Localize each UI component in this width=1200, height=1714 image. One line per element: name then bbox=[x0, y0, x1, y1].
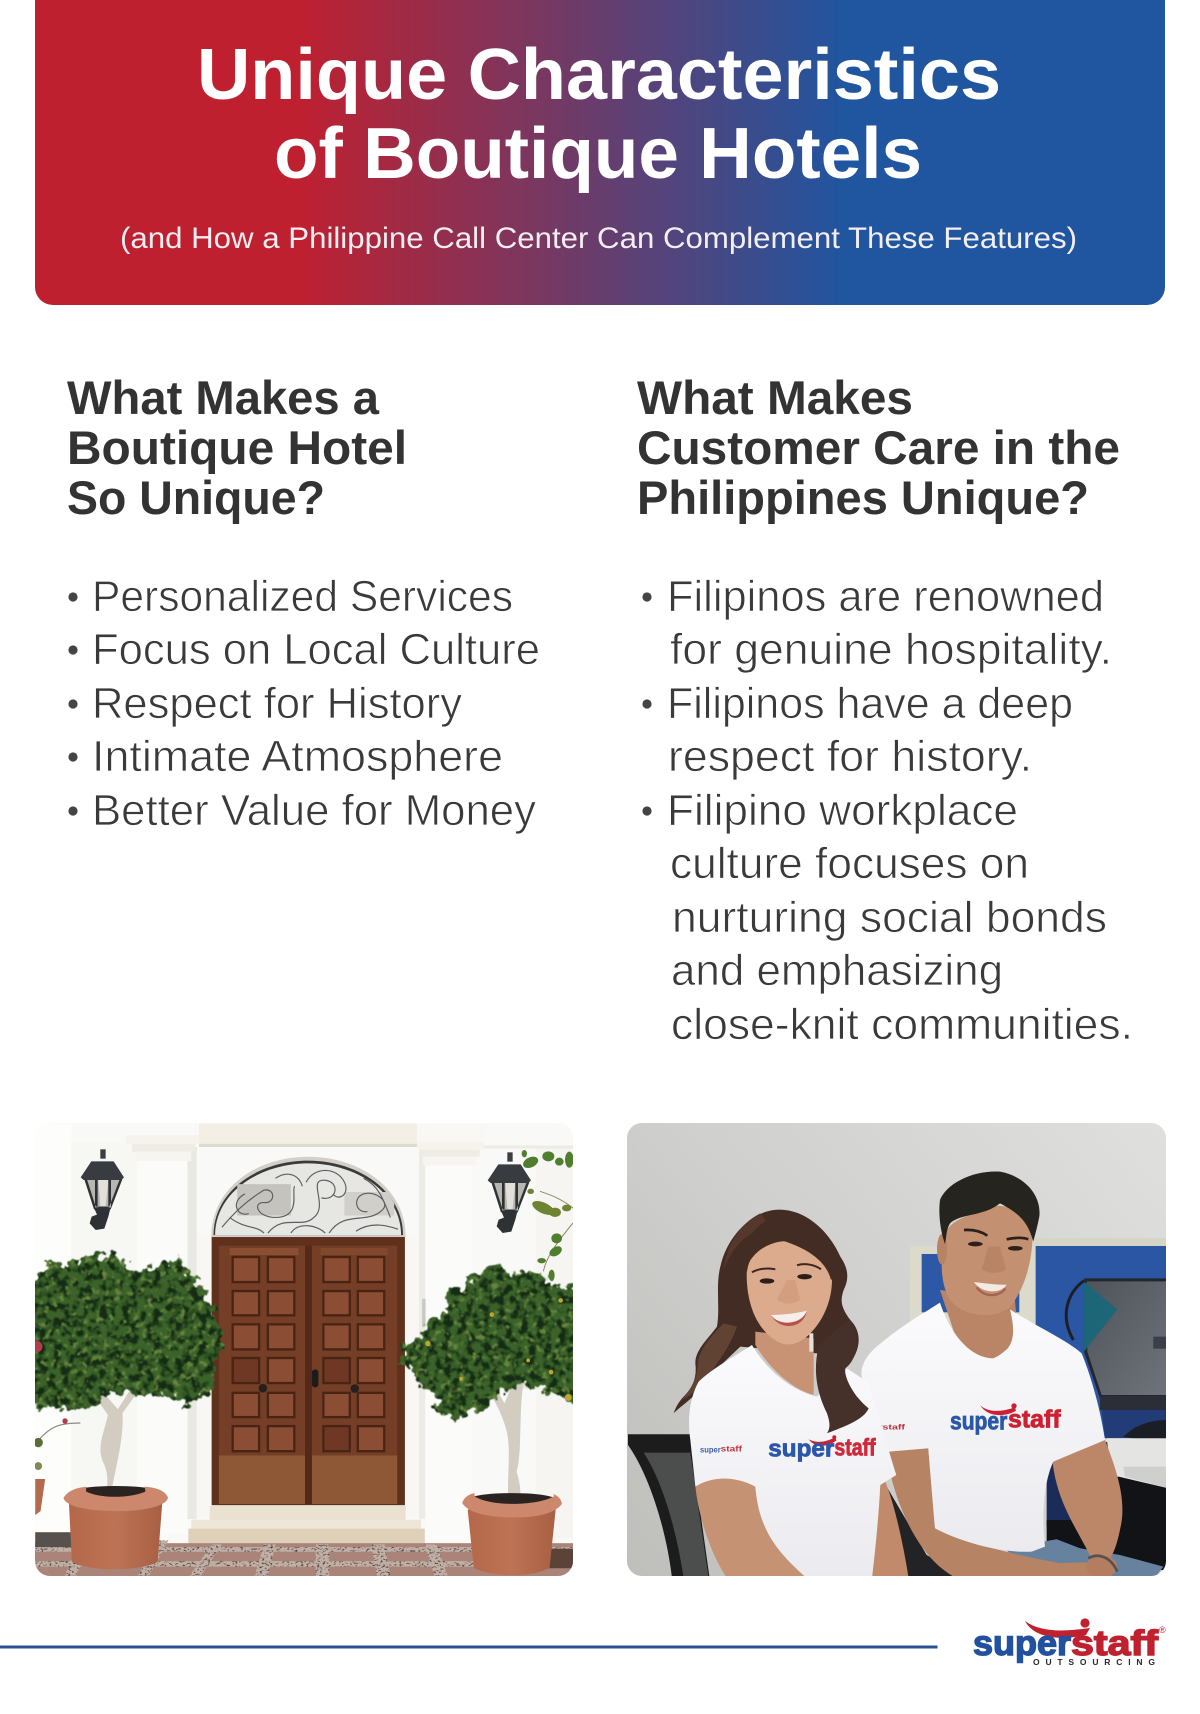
neck bbox=[940, 1290, 1018, 1360]
right column bullet list: and emphasizing bbox=[671, 946, 1003, 995]
footer divider line bbox=[0, 1646, 938, 1648]
logo wordmark bbox=[973, 1624, 1158, 1663]
blue partition bbox=[910, 1238, 1169, 1438]
left column bullet list bbox=[68, 572, 540, 835]
double wooden door bbox=[212, 1237, 405, 1505]
monitor bbox=[1066, 1278, 1168, 1445]
top cornice bbox=[199, 1123, 417, 1145]
right column bullet list: close-knit communities. bbox=[671, 1000, 1133, 1049]
sleeve logo: staff bbox=[721, 1445, 742, 1454]
registered mark: ® bbox=[1159, 1625, 1166, 1635]
photo: boutique hotel entrance bbox=[20, 1120, 582, 1582]
arched fanlight bbox=[211, 1157, 406, 1237]
t-shirt bbox=[861, 1303, 1105, 1552]
right column bullet list: culture focuses on bbox=[670, 839, 1029, 888]
title: of Boutique Hotels bbox=[274, 114, 922, 194]
banner gradient background bbox=[35, 0, 1165, 305]
title bbox=[197, 35, 1001, 194]
logo tagline: OUTSOURCING bbox=[1033, 1657, 1155, 1667]
right column heading: Philippines Unique? bbox=[637, 471, 1089, 524]
left wall lamp bbox=[81, 1149, 124, 1230]
left column heading: What Makes a bbox=[67, 371, 380, 424]
door surround bbox=[197, 1235, 419, 1517]
hair front bbox=[742, 1220, 834, 1280]
pillars bbox=[137, 1159, 188, 1535]
right column bullet list: for genuine hospitality. bbox=[670, 625, 1112, 674]
shirt logo: staff bbox=[1008, 1405, 1061, 1433]
pebble bands bbox=[31, 1540, 578, 1578]
logo swoosh bbox=[1025, 1621, 1090, 1638]
hair bbox=[939, 1172, 1040, 1244]
right column bullet list: Filipinos have a deep bbox=[667, 679, 1073, 728]
foliage bbox=[392, 1269, 582, 1421]
t-shirt bbox=[689, 1345, 896, 1578]
left column heading bbox=[67, 371, 407, 524]
desk bbox=[1047, 1438, 1168, 1570]
left arm bbox=[695, 1479, 810, 1578]
right column bullet list: Filipinos are renowned bbox=[667, 572, 1104, 621]
right column heading: Customer Care in the bbox=[637, 421, 1120, 474]
soil bbox=[474, 1493, 552, 1504]
photo: two smiling call center agents bbox=[627, 1123, 1169, 1580]
shirt logo bbox=[950, 1403, 1061, 1435]
pot bbox=[69, 1502, 162, 1569]
left column heading: So Unique? bbox=[67, 471, 325, 524]
right column heading bbox=[637, 371, 1120, 524]
yellow leaves bbox=[425, 1298, 572, 1401]
header banner bbox=[35, 0, 1165, 305]
superstaff outsourcing logo bbox=[973, 1618, 1166, 1667]
left column bullet list: Respect for History bbox=[92, 679, 462, 728]
foliage bbox=[20, 1258, 220, 1411]
right column bullet list bbox=[642, 572, 1133, 1049]
logo figure head bbox=[1080, 1618, 1090, 1628]
man's right arm bbox=[1053, 1440, 1122, 1559]
wall ledge bbox=[146, 1392, 176, 1395]
right wall lamp bbox=[488, 1152, 531, 1233]
left column bullet list: Personalized Services bbox=[92, 572, 513, 621]
jeans bbox=[1007, 1539, 1164, 1576]
right potted tree bbox=[392, 1269, 582, 1575]
entrance steps bbox=[188, 1506, 425, 1545]
seat behind man bbox=[888, 1488, 952, 1576]
facial features bbox=[964, 1230, 1028, 1239]
shirt logo: super bbox=[950, 1407, 1007, 1435]
soil bbox=[86, 1486, 146, 1497]
sleeve logo bbox=[700, 1445, 742, 1454]
subtitle: (and How a Philippine Call Center Can Complement These Features) bbox=[120, 222, 1077, 255]
logo wordmark: super bbox=[973, 1624, 1071, 1663]
shirt logo: staff bbox=[834, 1434, 876, 1461]
office background and man bbox=[861, 1172, 1169, 1580]
face bbox=[942, 1206, 1033, 1315]
man's left arm and hands bbox=[886, 1448, 1103, 1580]
right column bullet list: nurturing social bonds bbox=[672, 893, 1107, 942]
left column bullet list: Better Value for Money bbox=[92, 786, 536, 835]
office wall bbox=[627, 1123, 1166, 1576]
shirt logo: super bbox=[768, 1436, 834, 1463]
left potted tree bbox=[20, 1258, 220, 1569]
right column heading: What Makes bbox=[637, 371, 913, 424]
facial features bbox=[752, 1264, 821, 1272]
right column bullet list: respect for history. bbox=[668, 732, 1032, 781]
hair over shoulder bbox=[816, 1320, 869, 1433]
hair back bbox=[674, 1210, 859, 1413]
sleeve logo: rstaff bbox=[878, 1422, 906, 1431]
title: Unique Characteristics bbox=[197, 35, 1001, 115]
left column bullet list: Intimate Atmosphere bbox=[92, 732, 503, 781]
right arm bbox=[872, 1482, 909, 1578]
sleeve logo: super bbox=[700, 1445, 721, 1454]
climbing vine bbox=[521, 1150, 574, 1281]
left column heading: Boutique Hotel bbox=[67, 421, 407, 474]
right column bullet list: Filipino workplace bbox=[667, 786, 1018, 835]
woman bbox=[628, 1210, 909, 1578]
small flowering branch bbox=[32, 1341, 80, 1515]
left column bullet list: Focus on Local Culture bbox=[92, 625, 540, 674]
white wall bbox=[31, 1120, 578, 1582]
patterned floor bbox=[35, 1532, 573, 1576]
pot bbox=[468, 1510, 556, 1575]
face bbox=[747, 1241, 832, 1344]
shirt logo bbox=[768, 1434, 876, 1463]
logo wordmark: staff bbox=[1071, 1624, 1158, 1663]
neck bbox=[755, 1332, 814, 1395]
office chair bbox=[628, 1434, 710, 1578]
